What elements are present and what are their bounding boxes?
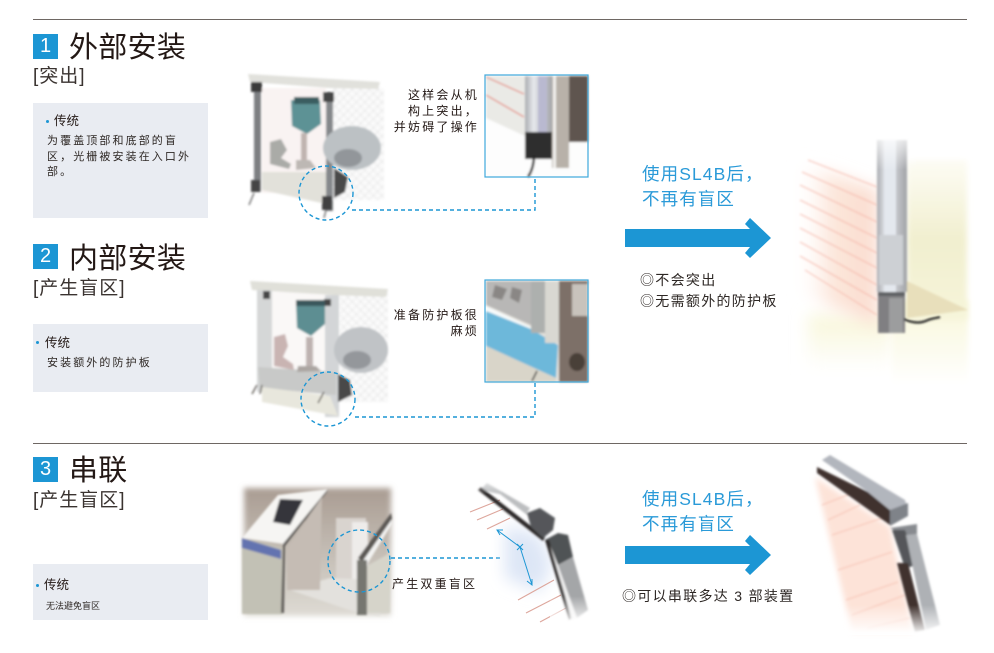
section 3 number <box>33 457 58 482</box>
panel text <box>47 134 191 178</box>
section 3 heading: 串联 <box>69 455 128 487</box>
text: benefit headline 1: 使用SL4B后， <box>642 164 764 184</box>
panel: conventional, section 3 <box>33 564 208 620</box>
note: section 1 problem: 构上突出， <box>408 104 479 118</box>
inset: protruding sensor end <box>485 75 588 177</box>
callout: dashed circle and connector, section 3 <box>328 530 503 592</box>
panel text: 安装额外的防护板 <box>47 357 152 369</box>
text: benefit headline 2 <box>642 489 764 534</box>
note: section 1 problem: 这样会从机 <box>408 88 479 102</box>
panel: conventional, section 2 <box>33 324 208 392</box>
panel text: 为覆盖顶部和底部的盲 <box>47 135 178 147</box>
inset: extra protective plate <box>485 280 588 382</box>
photo: machine with internal light curtain <box>250 281 388 417</box>
photo: SL4B mounted without protrusion <box>795 128 968 385</box>
text: benefit list 1 <box>640 272 778 309</box>
note: section 1 problem <box>394 88 479 134</box>
note: section 2 problem <box>394 308 479 338</box>
panel text: 部。 <box>47 166 73 178</box>
photo: machine with external light curtain <box>248 74 384 218</box>
section 1 heading: 外部安装 <box>69 32 186 64</box>
note: section 2 problem: 准备防护板很 <box>394 308 479 322</box>
panel label: 传统 <box>45 336 70 350</box>
bullet <box>36 584 39 587</box>
panel text: 区，光栅被安装在入口外 <box>47 150 191 162</box>
section 2 number <box>33 244 58 269</box>
section 2 subheading: [产生盲区] <box>33 278 126 299</box>
note: section 2 problem: 麻烦 <box>451 324 479 338</box>
panel: conventional, section 1 <box>33 103 208 218</box>
panel text: 无法避免盲区 <box>46 601 100 611</box>
photo: series connection machine <box>242 488 392 616</box>
note: section 1 problem: 并妨碍了操作 <box>394 120 479 134</box>
section 2 heading: 内部安装 <box>69 243 186 275</box>
section 3 number: 3 <box>40 458 51 480</box>
text: 1 <box>40 35 51 57</box>
text: benefit headline 2: 使用SL4B后， <box>642 489 764 509</box>
bullet <box>36 341 39 344</box>
photo: double blind zone close-up <box>470 478 594 626</box>
callout: dashed circle and connector, section 2 <box>301 372 535 426</box>
icon: blind zone double-headed arrows <box>497 530 532 585</box>
note: section 3 problem: 产生双重盲区 <box>392 577 477 591</box>
text: benefit headline 1: 不再有盲区 <box>642 189 735 209</box>
text: benefit headline 2: 不再有盲区 <box>642 514 735 534</box>
text: benefit list 2: ◎可以串联多达 3 部装置 <box>622 588 794 604</box>
arrow: section 3 <box>625 535 771 575</box>
panel label: 传统 <box>44 578 69 592</box>
section 2 number: 2 <box>40 245 51 267</box>
callout: dashed circle and connector, section 1 <box>299 166 535 220</box>
panel label: 传统 <box>54 114 79 128</box>
text: benefit list 1: ◎无需额外的防护板 <box>640 293 778 309</box>
text: benefit list 1: ◎不会突出 <box>640 272 716 288</box>
section 3 subheading: [产生盲区] <box>33 490 126 511</box>
text: benefit headline 1 <box>642 164 764 209</box>
arrow: section 1 to 2 <box>625 218 771 258</box>
bullet <box>46 120 49 123</box>
section 1 subheading: [突出] <box>33 66 86 87</box>
photo: SL4B series connection <box>815 455 950 635</box>
